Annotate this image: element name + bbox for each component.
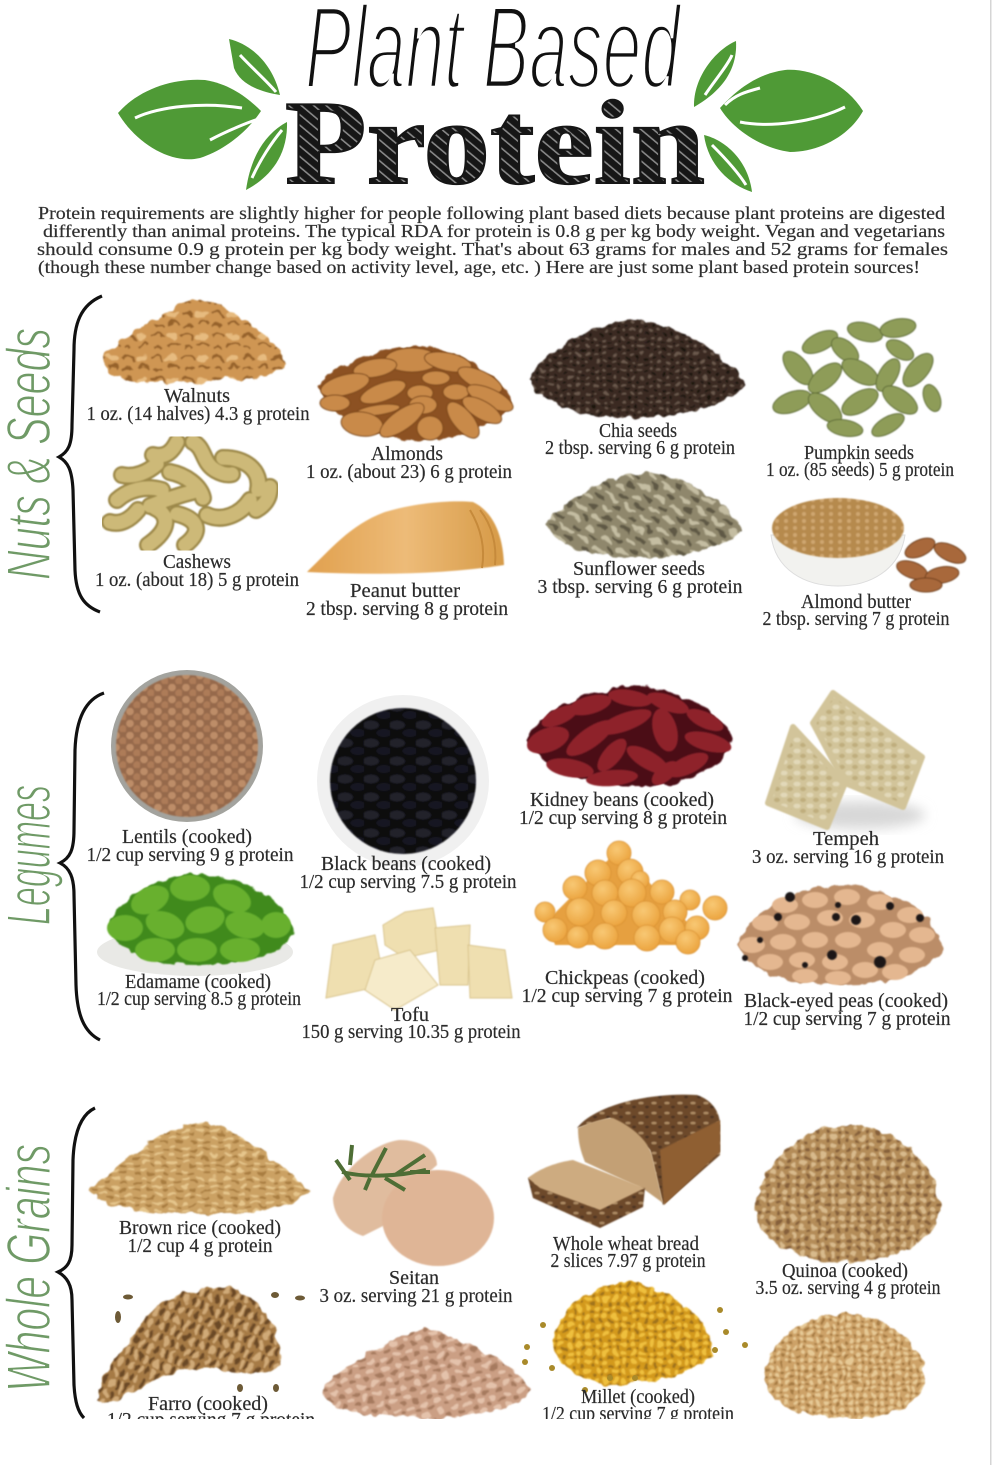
food: walnuts: 1 oz. (14 halves) 4.3 g protein: [86, 404, 310, 425]
food: kidney beans: 1/2 cup serving 8 g protein: [519, 808, 727, 829]
food: whole wheat bread: 2 slices 7.97 g protein: [550, 1251, 706, 1272]
food: kidney beans: [519, 686, 734, 829]
food: lentils: [86, 670, 294, 866]
food: sunflower seeds: [538, 472, 743, 598]
food: cashews: [95, 442, 299, 591]
food: almonds: [306, 345, 516, 483]
food: black beans: [300, 695, 517, 893]
food: tempeh: [752, 693, 944, 868]
food: chia seeds: 2 tbsp. serving 6 g protein: [545, 438, 735, 459]
food: tofu: [302, 908, 521, 1043]
food: farro: [98, 1287, 315, 1431]
food: peanut butter: [306, 501, 508, 620]
panel: legumes: [0, 670, 951, 1043]
title: Protein: Protein: [285, 76, 705, 209]
food: edamame: 1/2 cup serving 8.5 g protein: [97, 989, 301, 1010]
food: almonds: 1 oz. (about 23) 6 g protein: [306, 462, 512, 483]
food: black beans: 1/2 cup serving 7.5 g protein: [300, 872, 517, 893]
food: peanut butter: 2 tbsp. serving 8 g protein: [306, 599, 508, 620]
food: whole wheat bread: Whole wheat bread: [553, 1234, 699, 1255]
leaves: left cluster: [118, 39, 287, 190]
food: quinoa: [755, 1124, 941, 1299]
food: pumpkin seeds: Pumpkin seeds: [804, 443, 914, 464]
brace: [58, 1108, 95, 1418]
food: chickpeas: Chickpeas (cooked): [545, 968, 705, 989]
food: lentils: Lentils (cooked): [122, 827, 252, 848]
food: sunflower seeds: Sunflower seeds: [573, 559, 705, 580]
food: edamame: Edamame (cooked): [125, 972, 271, 993]
food: seitan: Seitan: [389, 1268, 439, 1289]
food: black-eyed peas: [738, 885, 951, 1030]
food: seitan: 3 oz. serving 21 g protein: [320, 1286, 513, 1307]
intro paragraph: differently than animal proteins. The typical RDA for protein is 0.8 g per kg body weight. Vegan and vegetarians: [43, 221, 945, 241]
food: chickpeas: 1/2 cup serving 7 g protein: [522, 986, 733, 1007]
food: chia seeds: [528, 320, 745, 459]
food: peanut butter: Peanut butter: [350, 581, 461, 602]
food: millet: 1/2 cup serving 7 g protein: [542, 1404, 734, 1425]
brace: [59, 296, 102, 612]
brace: [60, 693, 104, 1040]
food: lentils: 1/2 cup serving 9 g protein: [86, 845, 294, 866]
food: tempeh: Tempeh: [813, 829, 879, 850]
intro paragraph: (though these number change based on activity level, age, etc. ) Here are just some plant based protein sources!: [38, 257, 920, 278]
title block: [118, 0, 863, 209]
food: edamame: [97, 875, 301, 1010]
food: pumpkin seeds: 1 oz. (85 seeds) 5 g protein: [766, 460, 954, 481]
food: chia seeds: Chia seeds: [599, 421, 677, 442]
food: millet: Millet (cooked): [581, 1387, 695, 1408]
food: seitan: [320, 1140, 513, 1307]
food: quinoa: 3.5 oz. serving 4 g protein: [756, 1278, 941, 1299]
food: walnuts: Walnuts: [164, 386, 230, 407]
intro paragraph: Protein requirements are slightly higher for people following plant based diets because plant proteins are digested: [38, 203, 945, 223]
food: black-eyed peas: Black-eyed peas (cooked): [744, 991, 948, 1012]
food: black-eyed peas: 1/2 cup serving 7 g protein: [744, 1009, 951, 1030]
food: pumpkin seeds: [766, 316, 954, 481]
food: millet: [522, 1282, 748, 1425]
food: barley: [322, 1326, 530, 1418]
panel: whole grains: [0, 1095, 941, 1431]
food: brown rice: 1/2 cup 4 g protein: [128, 1236, 273, 1257]
food: almond butter: Almond butter: [801, 592, 911, 613]
food: almond butter: [762, 498, 969, 630]
food: chickpeas: [522, 841, 733, 1007]
bottom margin: [0, 1419, 990, 1465]
intro paragraph: [37, 203, 948, 278]
food: whole wheat bread: [528, 1095, 720, 1272]
food: sunflower seeds: 3 tbsp. serving 6 g protein: [538, 577, 743, 598]
food: cashews: 1 oz. (about 18) 5 g protein: [95, 570, 299, 591]
food: kidney beans: Kidney beans (cooked): [530, 790, 714, 811]
food: farro: Farro (cooked): [148, 1394, 268, 1415]
food: tofu: 150 g serving 10.35 g protein: [302, 1022, 521, 1043]
food: walnuts: [86, 300, 310, 425]
food: cashews: Cashews: [163, 552, 231, 573]
food: almond butter: 2 tbsp. serving 7 g protein: [762, 609, 950, 630]
leaves: right cluster: [694, 41, 863, 192]
intro paragraph: should consume 0.9 g protein per kg body weight. That's about 63 grams for males and 52 grams for females: [37, 239, 948, 259]
food: brown rice: [88, 1122, 310, 1257]
food: farro: 1/2 cup serving 7 g protein: [107, 1410, 315, 1431]
panel: nuts and seeds: [0, 296, 969, 630]
food: quinoa: Quinoa (cooked): [782, 1261, 908, 1282]
food: tofu: Tofu: [391, 1005, 429, 1026]
food: amaranth: [764, 1313, 925, 1418]
food: brown rice: Brown rice (cooked): [119, 1218, 281, 1239]
food: tempeh: 3 oz. serving 16 g protein: [752, 847, 944, 868]
food: almonds: Almonds: [371, 444, 443, 465]
food: black beans: Black beans (cooked): [321, 854, 491, 875]
